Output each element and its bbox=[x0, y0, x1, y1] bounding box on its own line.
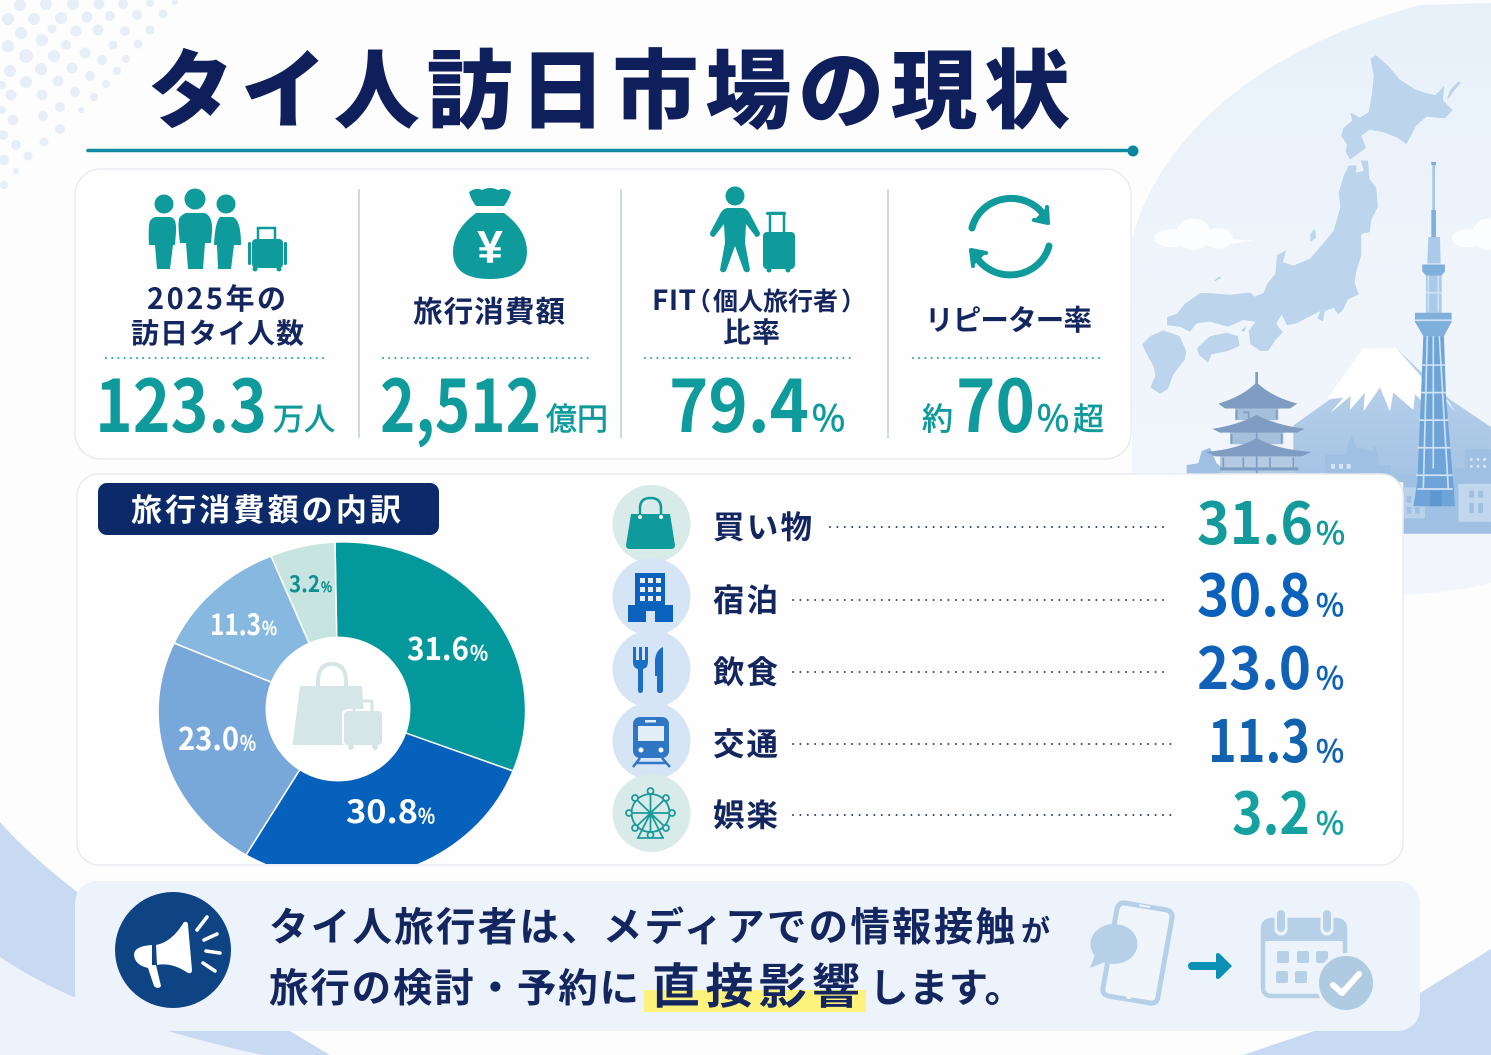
callout text bbox=[269, 896, 1050, 1017]
callout text: タイ人旅行者は、メディアでの情報接触 bbox=[269, 896, 1015, 953]
slice labels: 11.3 bbox=[210, 602, 261, 644]
slice labels: % bbox=[321, 577, 332, 597]
slice labels: 30.8 bbox=[346, 787, 418, 833]
map of Japan bbox=[1142, 54, 1462, 394]
panel: conclusion callout bbox=[75, 881, 1420, 1031]
callout text: 旅行の検討・予約に bbox=[269, 957, 639, 1014]
row: food: 飲食 bbox=[713, 647, 778, 693]
row: shopping: 買い物 bbox=[713, 502, 812, 548]
callout text: 直接影響 bbox=[652, 947, 860, 1017]
row: lodging bbox=[612, 549, 1344, 636]
title: タイ人訪日市場の現状 bbox=[148, 21, 1070, 146]
label: FIT bbox=[652, 279, 696, 319]
Mount Fuji bbox=[1293, 349, 1491, 482]
slice labels: 23.0 bbox=[178, 714, 239, 759]
Tokyo Skytree bbox=[1413, 162, 1455, 506]
icon: phone with speech bubble bbox=[1090, 903, 1172, 1003]
icon: traveler with suitcase bbox=[710, 186, 795, 272]
value: 79.4 bbox=[669, 348, 809, 453]
icon: ferris wheel bbox=[612, 774, 690, 852]
donut chart bbox=[158, 542, 526, 880]
value: 2,512 bbox=[380, 348, 541, 453]
row: entertainment: % bbox=[1316, 798, 1344, 843]
heading pill bbox=[98, 483, 439, 535]
label: 個人旅行者 bbox=[713, 282, 838, 318]
icon: money bag bbox=[453, 188, 527, 279]
stat: visitors bbox=[95, 188, 335, 453]
row: lodging: 宿泊 bbox=[713, 575, 778, 621]
icon: refresh arrows bbox=[971, 198, 1049, 275]
label: リピーター率 bbox=[925, 298, 1092, 339]
icon: hotel bbox=[612, 558, 690, 636]
row: entertainment bbox=[612, 767, 1344, 852]
icon: megaphone bbox=[115, 892, 231, 1008]
row: transport: 交通 bbox=[713, 719, 778, 765]
icon: shopping bag bbox=[612, 485, 690, 563]
label: 2025年の bbox=[147, 276, 286, 318]
row: entertainment: 娯楽 bbox=[713, 790, 778, 836]
building windows bbox=[1331, 458, 1491, 522]
value: % bbox=[812, 390, 845, 442]
value: 万人 bbox=[273, 394, 335, 439]
row: entertainment: 3.2 bbox=[1232, 767, 1310, 851]
label: 比率 bbox=[723, 311, 780, 351]
title underline bbox=[88, 146, 1138, 156]
slice labels: % bbox=[262, 614, 277, 641]
clouds bbox=[1154, 218, 1491, 250]
city buildings bbox=[1187, 436, 1491, 534]
value: 億円 bbox=[546, 394, 608, 439]
row: lodging: % bbox=[1316, 580, 1344, 625]
row: shopping: 31.6 bbox=[1197, 477, 1313, 561]
icon: bag and suitcase bbox=[292, 664, 383, 750]
slice labels bbox=[178, 567, 488, 833]
icon: money bag: ¥ bbox=[477, 221, 503, 273]
value: 超 bbox=[1073, 394, 1104, 439]
stat: visitors: 訪日タイ人数 bbox=[131, 312, 304, 352]
label: 旅行消費額 bbox=[413, 289, 565, 331]
row: transport: 11.3 bbox=[1208, 695, 1310, 779]
stat: repeater ratio bbox=[922, 198, 1104, 453]
row: shopping: % bbox=[1316, 508, 1345, 553]
panel: spending breakdown bbox=[77, 474, 1403, 880]
label: ） bbox=[841, 282, 866, 318]
row: transport: % bbox=[1316, 726, 1344, 771]
callout text: が bbox=[1021, 908, 1050, 950]
value bbox=[922, 348, 1104, 453]
icon: fork and knife bbox=[612, 630, 690, 708]
slice labels: % bbox=[470, 637, 488, 666]
pagoda bbox=[1206, 372, 1312, 475]
label: （ bbox=[686, 282, 711, 318]
row: food bbox=[612, 622, 1344, 708]
stat: FIT ratio bbox=[652, 186, 866, 453]
icon: calendar with check bbox=[1263, 910, 1376, 1013]
row: shopping bbox=[612, 477, 1345, 563]
illustration: Japan map and landmarks bbox=[1142, 54, 1491, 534]
heading pill: 旅行消費額の内訳 bbox=[131, 485, 401, 530]
stat: spending bbox=[380, 188, 608, 453]
row: transport bbox=[612, 695, 1344, 780]
icon: train bbox=[612, 702, 690, 780]
row: lodging: 30.8 bbox=[1197, 549, 1311, 633]
slice labels: 31.6 bbox=[407, 624, 469, 669]
value: 123.3 bbox=[95, 348, 267, 453]
icon: group with suitcase bbox=[149, 188, 287, 272]
row: food: 23.0 bbox=[1197, 622, 1311, 706]
value: % bbox=[1037, 390, 1069, 442]
slice labels: % bbox=[418, 800, 435, 829]
value: 約 bbox=[922, 394, 953, 439]
slice labels: 3.2 bbox=[289, 567, 320, 599]
value: 70 bbox=[956, 348, 1035, 453]
callout text: します。 bbox=[869, 957, 1024, 1014]
label bbox=[652, 279, 866, 351]
arrow bbox=[1188, 953, 1232, 979]
row: food: % bbox=[1316, 653, 1344, 698]
slice labels: % bbox=[240, 727, 256, 756]
panel: key statistics bbox=[75, 169, 1131, 459]
